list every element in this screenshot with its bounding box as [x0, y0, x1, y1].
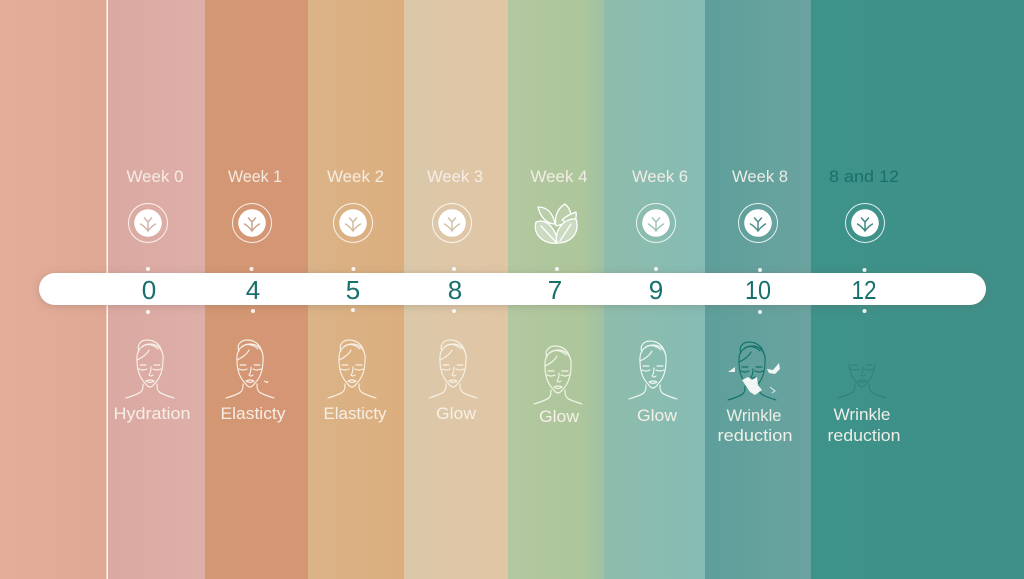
timeline numbers: 8 [448, 275, 462, 305]
week labels: Week 0 [126, 168, 184, 186]
week labels: Week 2 [327, 168, 384, 186]
icon: sprout badge week 1 [232, 204, 272, 242]
icon: leaves week 4 [535, 204, 577, 243]
outcome labels: Glow [539, 407, 580, 426]
week labels: Week 6 [632, 168, 688, 186]
outcome labels: Wrinkle [834, 405, 890, 424]
icon: sprout badge week 8 [738, 204, 778, 242]
vertical start line [106, 0, 108, 579]
outcome labels: reduction [718, 426, 792, 445]
panel: week 4 [508, 0, 604, 579]
week labels: Week 3 [427, 168, 483, 186]
panel: week 2 [308, 0, 404, 579]
icon: faded face weeks 8 and 12 [838, 364, 886, 398]
icon: face week 4 [534, 346, 582, 404]
icon: sprout badge week 3 [432, 204, 472, 242]
outcome labels: Wrinkle [726, 406, 782, 425]
outcome labels: Hydration [114, 404, 190, 423]
week labels: Week 8 [732, 168, 788, 186]
timeline numbers: 0 [142, 275, 156, 305]
panel: week 6 [604, 0, 705, 579]
timeline dots below [146, 308, 866, 314]
outcome labels: Elasticty [220, 404, 286, 423]
icon: face week 2 [328, 340, 376, 398]
icon: sprout badge week 0 [128, 204, 168, 242]
panel: week 0 [108, 0, 205, 579]
icon: face week 8 with splash [728, 342, 780, 400]
panel: week 8 [705, 0, 811, 579]
panel: week 1 [205, 0, 308, 579]
icon: sprout badge week 6 [636, 204, 676, 242]
week labels: Week 1 [228, 168, 282, 186]
timeline numbers: 10 [745, 275, 771, 305]
timeline dots above [146, 267, 866, 272]
timeline numbers: 4 [246, 275, 260, 305]
week labels: Week 4 [530, 168, 588, 186]
week labels: 8 and 12 [829, 168, 899, 186]
panel: week 3 [404, 0, 508, 579]
icon: sprout badge weeks 8 and 12 [846, 204, 884, 242]
timeline bar [39, 273, 986, 305]
panel: weeks 8 and 12 [811, 0, 1024, 579]
timeline numbers: 9 [649, 275, 663, 305]
icon: sprout badge week 2 [334, 204, 372, 242]
outcome labels: Glow [436, 404, 477, 423]
timeline numbers [142, 275, 876, 305]
week labels [126, 168, 899, 186]
outcome labels: Glow [637, 406, 678, 425]
icon: face week 1 [226, 340, 274, 398]
outcome labels: reduction [828, 426, 900, 445]
outcome labels: Elasticty [324, 404, 387, 423]
icon: face week 0 [126, 340, 174, 398]
timeline numbers: 5 [346, 275, 360, 305]
icon: face week 6 [629, 341, 677, 399]
timeline numbers: 7 [548, 275, 562, 305]
timeline numbers: 12 [852, 275, 876, 305]
icon: face week 3 [429, 340, 477, 398]
outcome labels [114, 404, 900, 445]
panel: left margin [0, 0, 108, 579]
